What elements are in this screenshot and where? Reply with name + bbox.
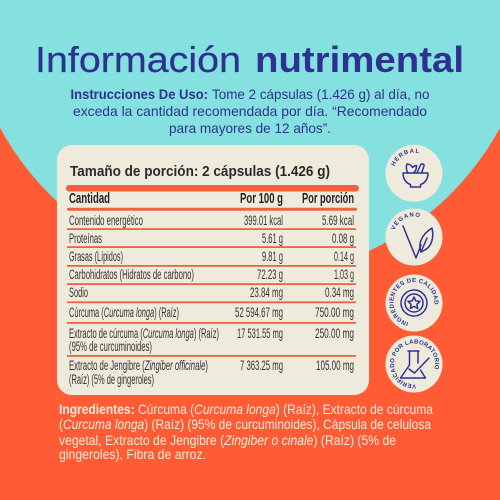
badge: herbal: HERBAL <box>390 148 419 166</box>
title: nutrimental <box>255 39 464 80</box>
row: ginger extract: 7 363.25 mg <box>240 358 283 373</box>
row: ginger extract: 105.00 mg <box>316 358 354 373</box>
row: carbohydrates: Carbohidratos (Hidratos de carbono) <box>69 267 194 282</box>
row: turmeric extract: Extracto de cúrcuma (Curcuma longa) (Raíz) <box>69 326 219 341</box>
ingredients text: vegetal, Extracto de Jengibre (Zingiber o cinale) (Raíz) (5% de <box>59 433 396 448</box>
usage instructions: Instrucciones De Uso: <box>70 86 208 102</box>
row: sodium: 0.34 mg <box>325 285 354 300</box>
row: protein: 0.08 g <box>332 231 354 246</box>
row: energy: Contenido energético <box>69 213 143 228</box>
row: fats: 0.14 g <box>334 249 354 264</box>
serving size heading: Tamaño de porción: 2 cápsulas (1.426 g) <box>70 164 330 180</box>
badge: vegano: VEGANO <box>390 212 420 229</box>
table header: Por 100 g <box>240 191 283 207</box>
title: Información <box>35 39 241 80</box>
row: turmeric extract: 17 531.55 mg <box>237 326 283 341</box>
row: protein: 5.61 g <box>262 231 283 246</box>
table rules <box>66 185 359 357</box>
row: fats: 9.81 g <box>262 249 283 264</box>
badge: vegano <box>386 208 442 266</box>
row: ginger extract: Extracto de Jengibre (Zingiber officinale) <box>69 358 208 373</box>
usage instructions: exceda la cantidad recomendada por día. “Recomendado <box>73 103 427 119</box>
row: energy: 399.01 kcal <box>244 213 283 228</box>
row: turmeric: Cúrcuma (Curcuma longa) (Raíz) <box>69 305 179 320</box>
ingredients text: gingeroles), Fibra de arroz. <box>59 447 206 462</box>
row: protein <box>69 231 354 246</box>
icon: leaf check <box>403 226 433 258</box>
badge: ingredientes de calidad: INGREDIENTES DE CALIDAD <box>389 278 438 326</box>
row: energy: 5.69 kcal <box>322 213 354 228</box>
ingredients text <box>59 402 433 462</box>
ingredients text: Ingredientes: Cúrcuma (Curcuma longa) (Raíz), Extracto de cúrcuma <box>59 402 433 417</box>
row: sodium <box>69 285 354 300</box>
icon: lab flask with check mark <box>400 351 429 378</box>
title <box>35 39 464 80</box>
row: turmeric extract: (95% de curcuminoides) <box>69 339 152 354</box>
badge: verificado por laboratorio: VERIFICADO POR LABORATORIO <box>390 339 440 389</box>
row: fats: Grasas (Lípidos) <box>69 249 123 264</box>
row: sodium: Sodio <box>69 285 88 300</box>
row: ginger extract <box>69 358 354 387</box>
ingredients text: (Curcuma longa) (Raíz) (95% de curcuminoides), Cápsula de celulosa <box>59 417 431 432</box>
row: carbohydrates: 1.03 g <box>334 267 354 282</box>
row: turmeric extract: 250.00 mg <box>315 326 354 341</box>
icon: quality seal with star <box>401 290 427 316</box>
icon: bowl with leaves and pestle <box>403 164 428 187</box>
row: turmeric extract <box>69 326 354 354</box>
background: teal circle <box>0 0 500 277</box>
row: fats <box>69 249 354 264</box>
row: sodium: 23.84 mg <box>250 285 283 300</box>
table header: Por porción <box>302 191 354 207</box>
usage instructions: Tome 2 cápsulas (1.426 g) al día, no <box>212 86 430 102</box>
panel: nutrition table <box>57 145 369 395</box>
row: turmeric <box>69 305 354 320</box>
badge: herbal <box>386 144 442 202</box>
usage instructions <box>70 86 430 136</box>
table header: Cantidad <box>69 191 110 207</box>
row: protein: Proteínas <box>69 231 102 246</box>
table header <box>69 191 354 207</box>
row: turmeric: 52 594.67 mg <box>235 305 283 320</box>
row: turmeric: 750.00 mg <box>315 305 354 320</box>
row: ginger extract: (Raíz) (5% de gingeroles) <box>69 372 154 387</box>
row: carbohydrates: 72.23 g <box>257 267 283 282</box>
usage instructions: para mayores de 12 años”. <box>169 120 331 136</box>
row: energy <box>69 213 354 228</box>
